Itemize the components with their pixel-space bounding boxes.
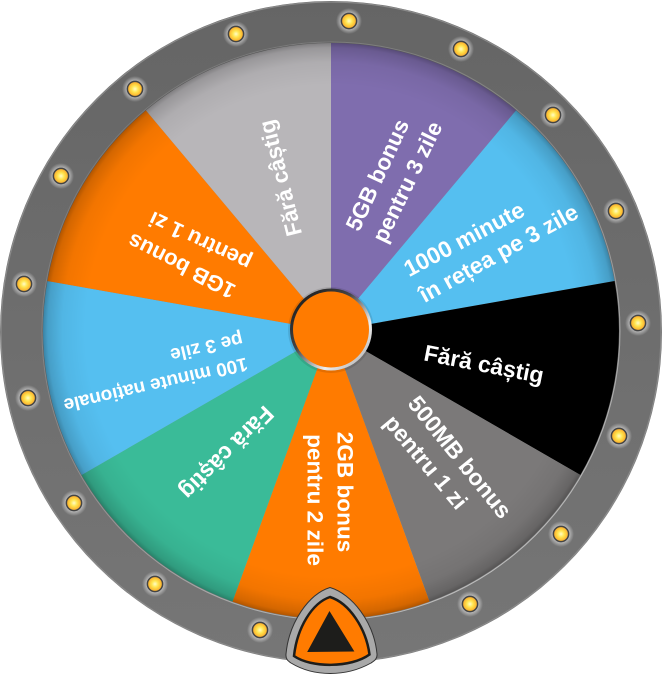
slice: orange left <box>47 110 331 331</box>
label: 500MB bonus: 500MB bonus <box>403 391 517 523</box>
label: green slice: Fără câștig <box>174 400 279 505</box>
label: 5GB bonus: 5GB bonus <box>341 115 414 235</box>
slice: orange bottom <box>232 331 430 619</box>
label: 100 minute: 100 minute naționale <box>62 353 249 415</box>
label: light grey slice: Fără câștig <box>254 117 307 239</box>
slice: purple <box>331 43 516 331</box>
center hub <box>288 287 374 373</box>
label: 1GB bonus <box>124 206 255 304</box>
label: black slice: Fără câștig <box>422 340 546 389</box>
label: 2GB bonus <box>302 432 358 566</box>
label: 500MB bonus: pentru 1 zi <box>379 410 473 514</box>
label: 100 minute: pe 3 zile <box>168 328 245 365</box>
slice: black <box>331 281 619 475</box>
label: 2GB bonus: pentru 2 zile <box>302 434 328 566</box>
slice: dark grey <box>331 331 580 602</box>
slice labels <box>62 115 583 566</box>
label: 1GB bonus: pentru 1 zi <box>145 206 255 276</box>
label: 5GB bonus: pentru 3 zile <box>367 118 448 246</box>
label: 1GB bonus: 1GB bonus <box>124 228 239 304</box>
label: 1000 minute: în rețea pe 3 zile <box>414 199 583 309</box>
icon: triangle arrow <box>308 612 354 652</box>
inner rim shadow <box>42 42 620 620</box>
label: 1000 minute: 1000 minute <box>399 196 529 282</box>
label: 2GB bonus: 2GB bonus <box>332 432 358 552</box>
wheel slices <box>43 43 619 619</box>
slice: light blue top <box>331 110 615 331</box>
slice: light grey <box>146 43 331 331</box>
pointer <box>286 588 377 674</box>
slice: light blue left <box>43 281 331 475</box>
slice: green <box>82 331 331 602</box>
